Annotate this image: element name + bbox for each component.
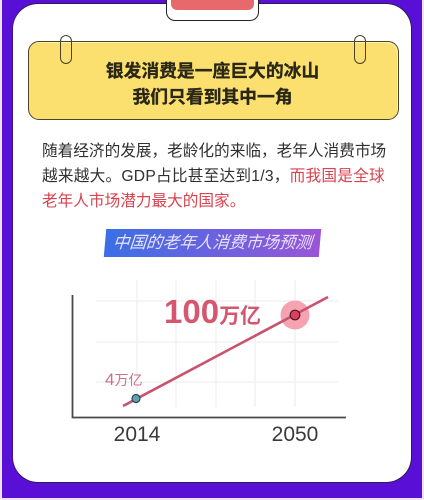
- text block: intro: [42, 142, 386, 210]
- label 100万亿: 100万亿: [164, 293, 261, 330]
- year 2050: 2050: [272, 423, 318, 446]
- intro line 3: 老年人市场潜力最大的国家。: [42, 193, 245, 210]
- point 2014: [132, 394, 140, 402]
- title line 2: 我们只看到其中一角: [132, 87, 293, 107]
- chart heading banner: 中国的老年人消费市场预测: [112, 233, 313, 252]
- tab red fill: [171, 0, 254, 10]
- heading box: [28, 41, 399, 120]
- icon: right paperclip: [354, 35, 366, 64]
- title line 1: 银发消费是一座巨大的冰山: [106, 61, 319, 81]
- intro line 1: 随着经济的发展，老龄化的来临，老年人消费市场: [42, 143, 386, 160]
- icon: left paperclip: [60, 35, 72, 64]
- highlight halo 2050: [280, 300, 310, 330]
- trend line: [123, 297, 328, 406]
- chart heading banner: [104, 229, 321, 257]
- label 4万亿: 4万亿: [105, 370, 142, 389]
- intro line 2: 越来越大。GDP占比甚至达到1/3，而我国是全球: [42, 168, 385, 185]
- year 2014: 2014: [114, 423, 161, 446]
- top tab: [166, 0, 259, 21]
- line chart: [72, 280, 346, 446]
- axes: [72, 295, 346, 418]
- point 2050: [290, 310, 300, 320]
